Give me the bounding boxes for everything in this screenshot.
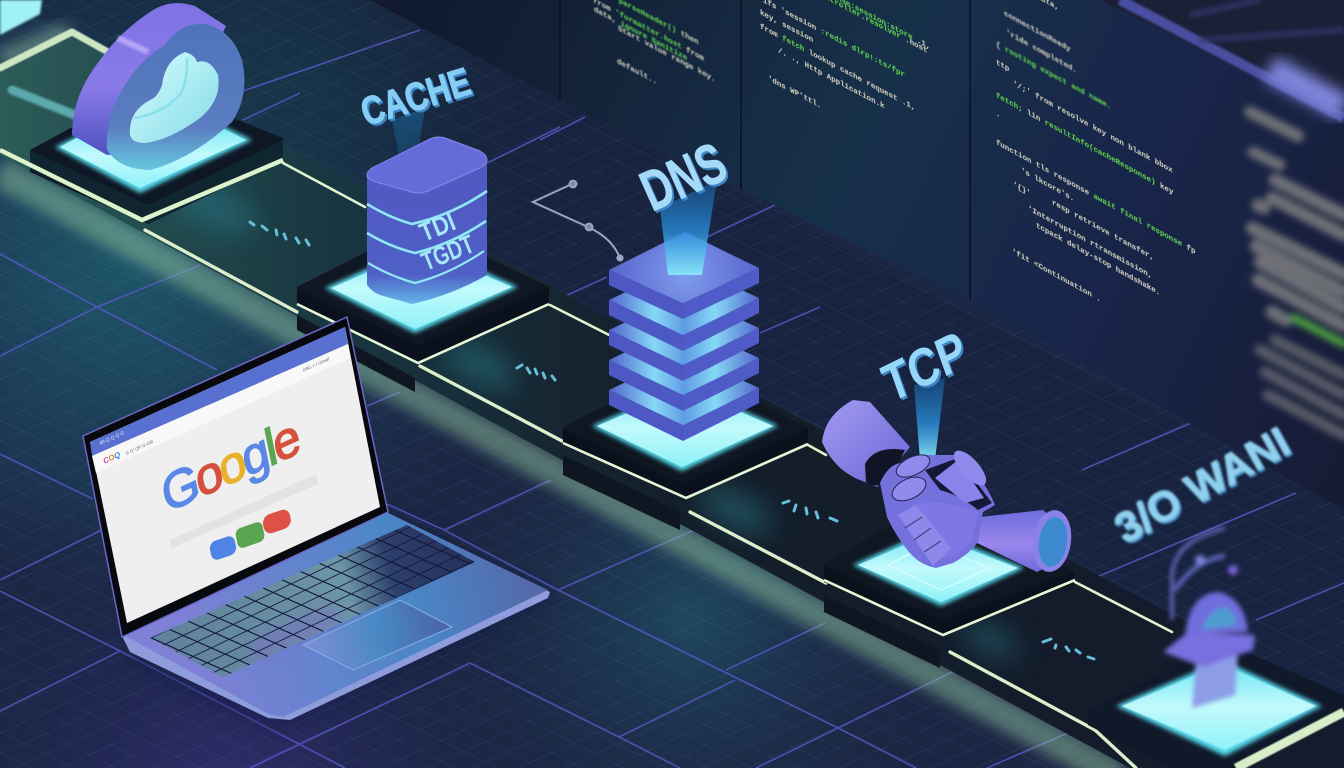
laptop base <box>122 512 550 720</box>
code panel 1: default.. <box>617 57 657 87</box>
Google logo: Google <box>157 406 305 524</box>
laptop shadow <box>125 525 555 730</box>
label beam <box>660 180 717 275</box>
platform <box>297 225 549 392</box>
code panel 3: resp retrieve transfer, <box>1052 198 1154 263</box>
node: TCP <box>822 321 1075 668</box>
icon: DNS server plates <box>609 232 759 441</box>
node: last step <box>1088 418 1344 768</box>
search bar <box>170 474 318 548</box>
label: CACHE: CACHE <box>358 61 478 136</box>
label: 3/O WANI: 3/O WANI <box>1107 418 1297 552</box>
node: DNS <box>563 130 808 530</box>
node: cloud <box>0 3 283 224</box>
label: CACHE: CACHE <box>356 59 476 134</box>
node: cache <box>297 59 549 392</box>
code panel 1: Start value range key. <box>618 24 716 85</box>
laptop <box>83 317 555 730</box>
stack labels: TGDT <box>417 229 479 277</box>
code panel 3: '{}' <box>1013 180 1031 199</box>
platform <box>0 85 283 224</box>
laptop screen: G8G + I Gmail <box>302 356 330 373</box>
code panel 3: . <box>996 109 1000 120</box>
icon: cloud <box>72 3 244 170</box>
code panel 3: { rooting expect and name. <box>996 40 1111 112</box>
left arm <box>822 400 910 487</box>
back wall with code panels <box>370 0 1344 510</box>
label beam <box>392 108 425 172</box>
code panel 3: 'ride completed. <box>1006 28 1077 76</box>
browser header <box>90 327 348 456</box>
code panel 2: 'dns WP'ttl. <box>768 74 821 111</box>
laptop screen <box>83 317 388 637</box>
browser toolbar: G G' QP G-G6i <box>125 439 154 456</box>
connector doodle <box>533 181 623 261</box>
code panel 3 <box>996 9 1196 305</box>
code panel 3: tcpack delay-stop handshake. <box>1036 221 1160 298</box>
code panel 3: 's lkcore's. <box>1021 166 1074 204</box>
platform <box>824 495 1075 668</box>
blurred right code <box>1250 112 1344 435</box>
segment glows <box>155 163 1022 664</box>
label: DNS: DNS <box>631 130 736 223</box>
label: DNS: DNS <box>633 132 738 225</box>
code panel 3: function tls response await final response fp <box>996 138 1196 257</box>
code panel 1 <box>592 0 716 87</box>
code panel 3: 'fit <Continuation . <box>1012 247 1101 305</box>
code panel 1: data, ignore Sanitize <box>594 5 687 63</box>
label: 3/O WANI: 3/O WANI <box>1109 420 1299 554</box>
code panel 3: '/;' from resolve key non blank bbox <box>1013 79 1173 176</box>
browser tabs: 88 Q Q Q G <box>99 430 125 447</box>
code panel 3: fetch; lin resultInfo(cacheResponse) key <box>996 91 1173 197</box>
flow dashes <box>12 90 1094 659</box>
icon: cache database stack <box>367 137 487 304</box>
code panel 3: 'Interruption rtransmission, <box>1028 204 1152 281</box>
platform <box>563 365 808 530</box>
label: TCP: TCP <box>875 321 974 414</box>
icon: robot handshake <box>822 400 1075 574</box>
code panel 3: ttp <box>996 58 1010 74</box>
keyboard <box>150 525 475 677</box>
right arm <box>975 510 1060 572</box>
search buttons <box>209 508 292 562</box>
trackpad <box>303 600 452 670</box>
code panel 3: connectionReady <box>1004 9 1071 54</box>
glow corner of previous node <box>0 0 42 35</box>
label beam <box>914 378 945 460</box>
stack labels <box>415 207 479 277</box>
code panel 2 <box>760 0 1059 113</box>
ceiling band <box>1100 0 1344 122</box>
browser logo: COQ <box>103 450 121 466</box>
icon: antenna blurred <box>1163 528 1255 708</box>
code panel 2: from fetch lookup cache request .1, <box>760 22 915 113</box>
stack labels: TDI <box>415 207 460 248</box>
platform <box>1088 640 1344 768</box>
code panel 2: key, session <box>760 8 813 45</box>
label: TCP: TCP <box>877 323 976 416</box>
hand <box>880 455 995 568</box>
code panel 2: /. ., Http Application.k <box>778 46 885 111</box>
